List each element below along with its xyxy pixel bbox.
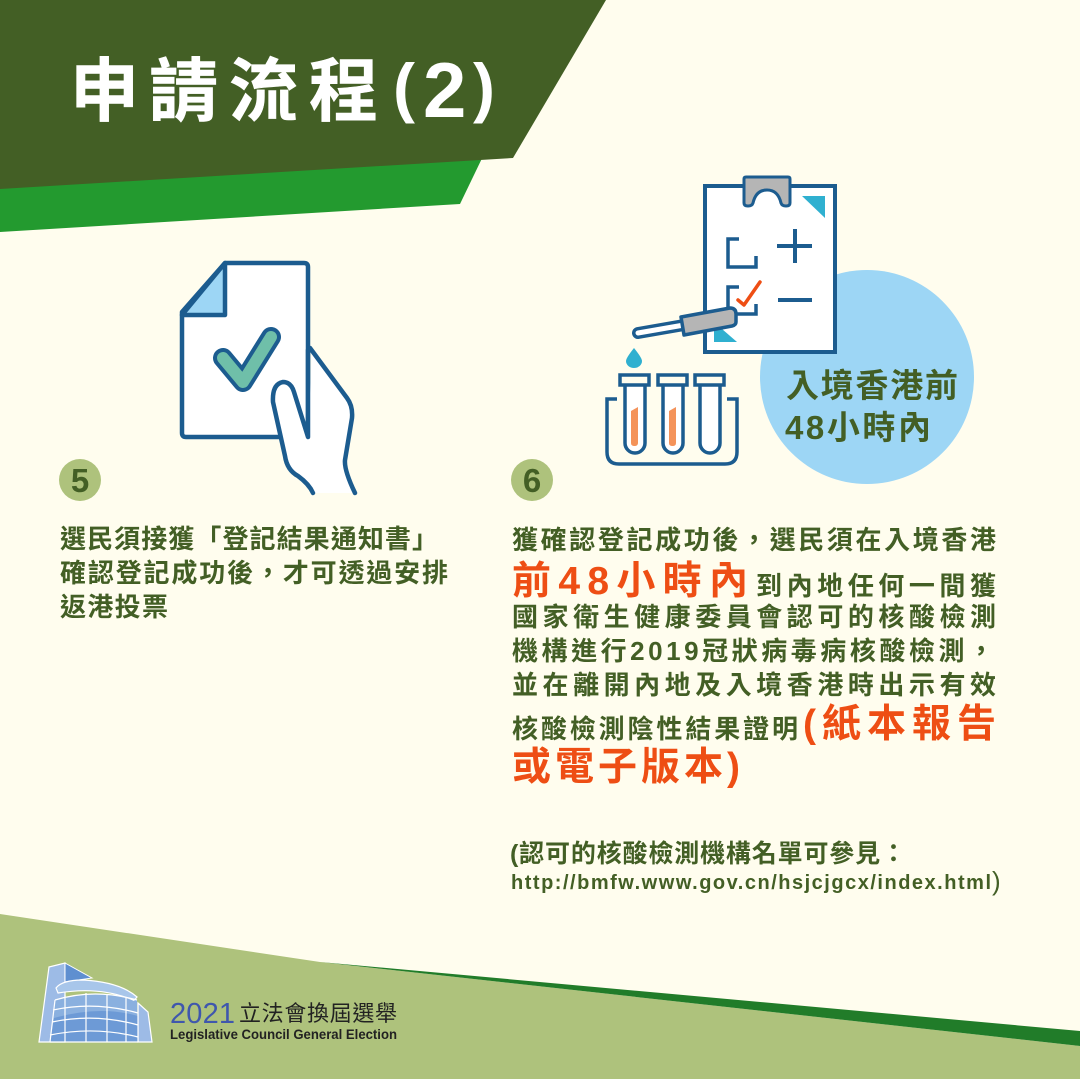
title: (	[393, 50, 415, 124]
note: approved institution list	[510, 839, 1001, 896]
note: approved institution list: http://bmfw.www.gov.cn/hsjcjgcx/index.html	[511, 872, 991, 894]
header banner	[0, 0, 606, 232]
text block: step 6: (紙本報告	[803, 703, 996, 746]
text block: step 6	[512, 525, 996, 789]
text block: step 6: 核酸檢測陰性結果證明	[512, 714, 798, 744]
icon: dropper	[638, 308, 736, 335]
badge: step 5: 5	[71, 462, 89, 499]
badge: step 6	[511, 459, 553, 501]
icon: test report clipboard	[705, 177, 835, 352]
text block: step 6: 並在離開內地及入境香港時出示有效	[512, 670, 996, 700]
logo: Legislative Council complex	[39, 963, 152, 1042]
logo text: Legislative Council General Election	[170, 1026, 397, 1042]
text block: step 5: 選民須接獲「登記結果通知書」	[60, 524, 438, 554]
icon: test tubes in rack	[607, 375, 737, 464]
text block: step 6: 機構進行2019冠狀病毒病核酸檢測，	[512, 636, 994, 666]
icon: water drop	[626, 348, 642, 368]
text block: step 6: 獲確認登記成功後，選民須在入境香港	[512, 525, 996, 555]
note: approved institution list: (認可的核酸檢測機構名單可參見：	[510, 839, 906, 868]
text block: step 5	[60, 524, 448, 622]
circle callout: within 48 hours before entry: 48小時內	[785, 409, 931, 446]
text block: step 6: 或電子版本)	[512, 746, 740, 789]
circle callout: within 48 hours before entry	[760, 270, 974, 484]
text block: step 6: 到內地任何一間獲	[756, 571, 996, 601]
footer band	[0, 914, 1080, 1079]
text block: step 5: 返港投票	[60, 592, 168, 622]
title: 申請流程	[70, 53, 378, 130]
title	[70, 46, 495, 134]
logo text: 立法會換屆選舉	[239, 1001, 397, 1026]
logo text	[170, 998, 397, 1042]
logo text: 2021	[170, 998, 235, 1030]
icon: document held in hand	[182, 263, 355, 493]
badge: step 6: 6	[523, 462, 541, 499]
title: 2	[423, 46, 466, 134]
circle callout: within 48 hours before entry: 入境香港前	[786, 367, 958, 404]
badge: step 5	[59, 459, 101, 501]
title: )	[473, 50, 495, 124]
text block: step 6: 國家衛生健康委員會認可的核酸檢測	[512, 602, 996, 632]
text block: step 6: 前48小時內	[512, 560, 748, 603]
text block: step 5: 確認登記成功後，才可透過安排	[60, 558, 448, 588]
note: approved institution list: )	[992, 866, 1001, 896]
